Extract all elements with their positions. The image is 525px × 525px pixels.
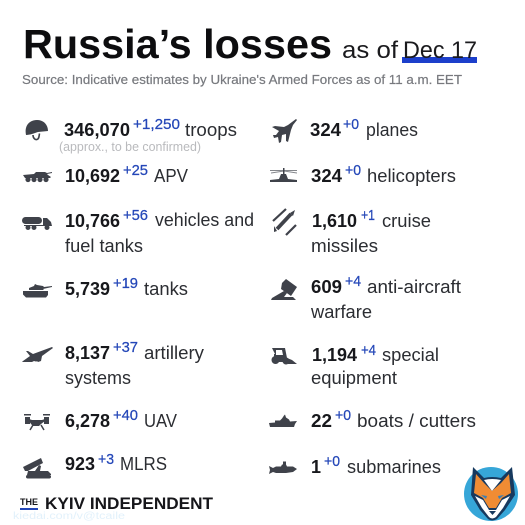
stat: artillery: +37: [113, 339, 138, 356]
stat: tanks: 5,739: [65, 279, 110, 299]
stat: planes: 324: [310, 120, 341, 140]
stat: UAV: 6,278: [65, 411, 110, 431]
stat: artillery: [22, 339, 205, 388]
stat: special equipment: special: [382, 344, 439, 365]
stat: APV: [23, 162, 189, 186]
stat: tanks: tanks: [144, 278, 188, 299]
stat: vehicles and fuel tanks: [22, 207, 254, 256]
title: Dec 17: [403, 37, 477, 64]
stat: anti-aircraft warfare: +4: [345, 273, 361, 290]
stat: submarines: [269, 453, 441, 477]
logo: The Kyiv Independent: KYIV INDEPENDENT: [45, 495, 213, 513]
stat: helicopters: helicopters: [367, 165, 456, 186]
stat: tanks: [23, 275, 188, 299]
stat: boats / cutters: boats / cutters: [357, 410, 476, 431]
watermark: kiedai.com/v@tcaile: [13, 511, 126, 522]
stat: troops: troops: [185, 119, 237, 140]
stat: APV: +25: [123, 162, 148, 179]
stat: APV: 10,692: [65, 166, 120, 186]
stat: artillery: 8,137: [65, 343, 110, 363]
stat: tanks: +19: [113, 275, 138, 292]
stat: boats / cutters: +0: [335, 407, 351, 424]
stat: helicopters: 324: [311, 166, 342, 186]
stat: cruise missiles: missiles: [311, 235, 378, 256]
stat: anti-aircraft warfare: [271, 273, 461, 322]
stat: vehicles and fuel tanks: +56: [123, 207, 148, 224]
stat: MLRS: 923: [65, 454, 95, 474]
stat: special equipment: +4: [361, 342, 376, 359]
stat: cruise missiles: [273, 207, 431, 256]
title: as of: [342, 37, 398, 64]
stat: anti-aircraft warfare: anti-aircraft: [367, 276, 461, 297]
icon: helicopter: [270, 168, 297, 182]
stat: troops: 346,070: [64, 120, 130, 140]
icon: anti-aircraft launcher: [271, 279, 297, 300]
stat: cruise missiles: cruise: [382, 210, 431, 231]
stat: anti-aircraft warfare: 609: [311, 277, 342, 297]
icon: helmet: [26, 120, 48, 140]
stat: artillery: systems: [65, 367, 131, 388]
title: [23, 21, 477, 67]
stat: UAV: [24, 407, 178, 431]
icon: submarine: [269, 462, 297, 474]
icon: plane: [272, 119, 297, 143]
stat: APV: APV: [154, 165, 189, 186]
title: Russia’s losses: [23, 21, 332, 67]
icon: cruise missiles: [273, 209, 296, 235]
stat: anti-aircraft warfare: warfare: [310, 301, 372, 322]
stat: troops: [26, 116, 237, 154]
stat: submarines: 1: [311, 457, 321, 477]
source note: Source: Indicative estimates by Ukraine's Armed Forces as of 11 a.m. EET: [22, 72, 462, 87]
stat: troops: (approx., to be confirmed): [59, 139, 201, 154]
stat: troops: +1,250: [133, 116, 180, 133]
stat: planes: +0: [343, 116, 359, 133]
stat: cruise missiles: 1,610: [312, 211, 357, 231]
stat: vehicles and fuel tanks: fuel tanks: [65, 235, 143, 256]
icon: ship: [269, 414, 297, 427]
stat: helicopters: [270, 162, 456, 186]
stat: cruise missiles: +1: [361, 207, 375, 224]
stat: special equipment: equipment: [311, 367, 397, 388]
stat: planes: planes: [366, 119, 418, 140]
icon: skid loader: [272, 348, 297, 364]
stat: artillery: artillery: [144, 342, 205, 363]
stat: helicopters: +0: [345, 162, 361, 179]
stat: boats / cutters: 22: [311, 411, 332, 431]
stat: special equipment: 1,194: [312, 345, 357, 365]
stat: UAV: +40: [113, 407, 138, 424]
stat: submarines: submarines: [347, 456, 441, 477]
icon: APV: [23, 172, 52, 182]
stat: submarines: +0: [324, 453, 340, 470]
icon: artillery: [22, 347, 53, 362]
stat: MLRS: +3: [98, 451, 114, 468]
stat: MLRS: MLRS: [120, 453, 167, 474]
stat: special equipment: [272, 342, 439, 388]
stat: MLRS: [23, 451, 167, 478]
stat: vehicles and fuel tanks: vehicles and: [155, 209, 254, 230]
icon: tank: [23, 284, 52, 298]
icon: fox logo: [464, 467, 518, 521]
stat: planes: [272, 116, 418, 143]
stat: vehicles and fuel tanks: 10,766: [65, 211, 120, 231]
stat: UAV: UAV: [144, 410, 178, 431]
icon: MLRS: [23, 458, 51, 478]
logo: The Kyiv Independent: THE: [20, 497, 38, 507]
icon: fuel truck: [22, 217, 52, 230]
icon: drone: [24, 414, 50, 430]
stat: boats / cutters: [269, 407, 476, 431]
